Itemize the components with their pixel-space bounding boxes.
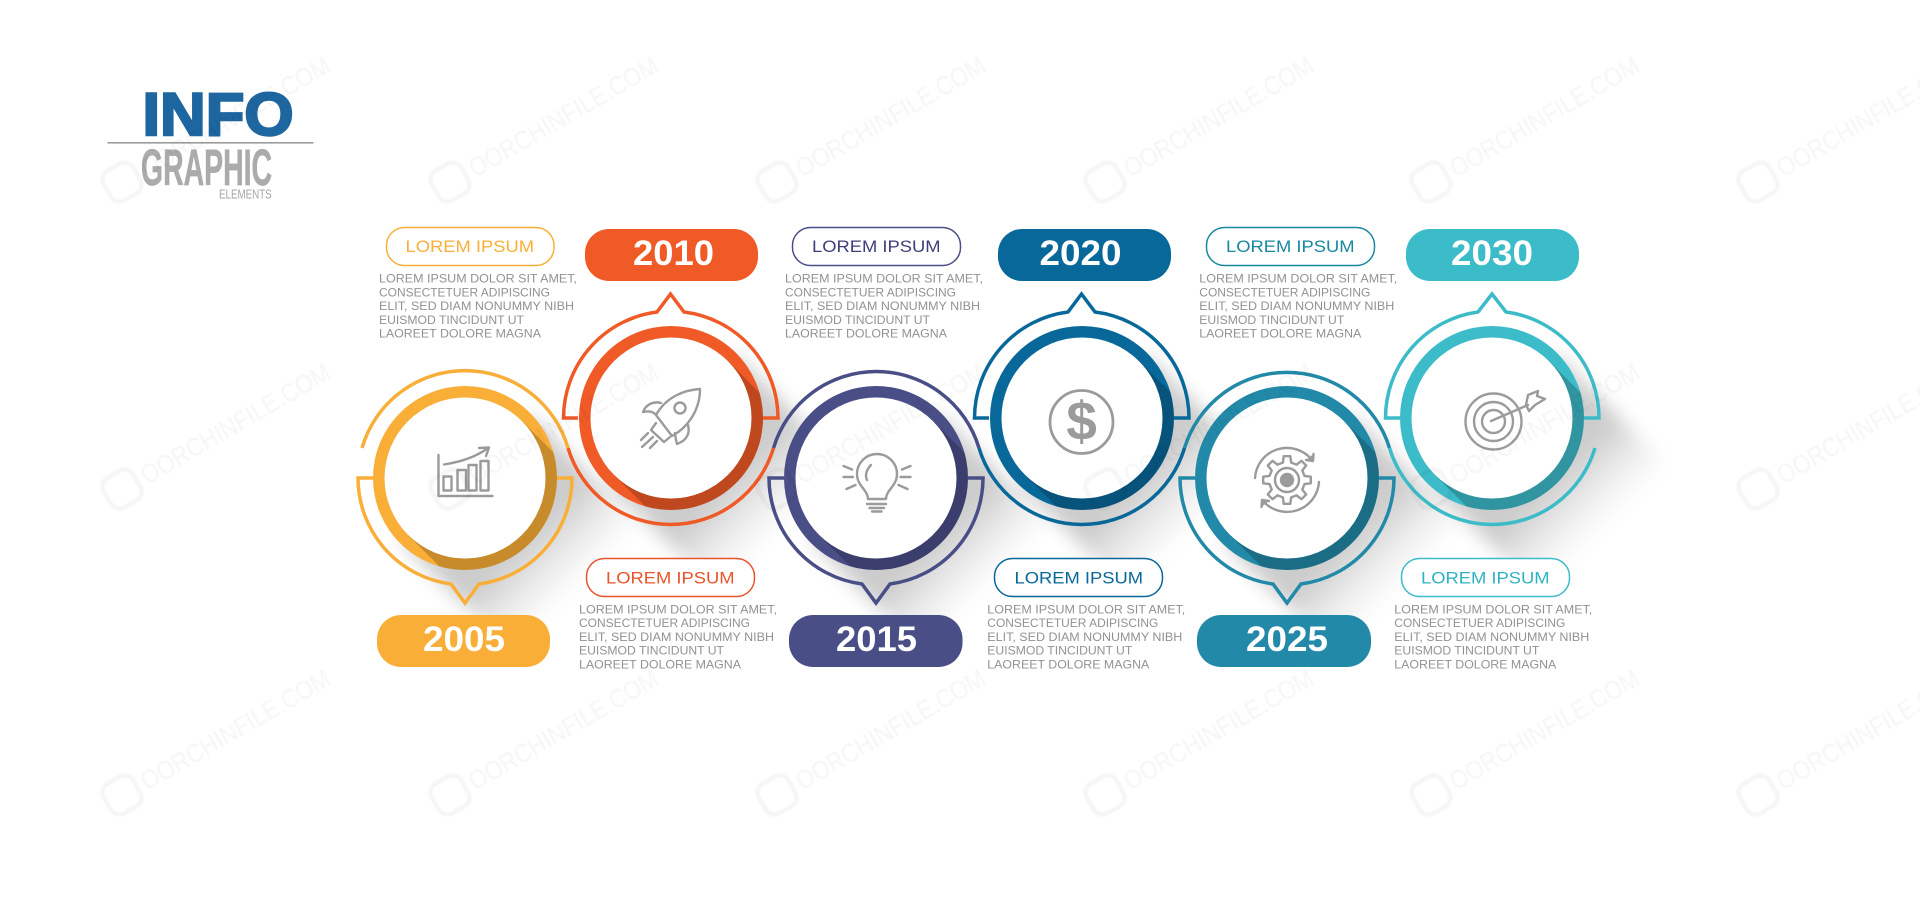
year pill 2005: 2005 xyxy=(423,620,505,659)
year pill 2015 xyxy=(789,615,962,667)
logo: infographic elements xyxy=(108,81,314,201)
body copy: CONSECTETUER ADIPISCING xyxy=(579,616,750,630)
watermark grid: OORCHINFILE.COM xyxy=(135,663,336,796)
watermark grid: OORCHINFILE.COM xyxy=(463,357,664,490)
body copy: ELIT, SED DIAM NONUMMY NIBH xyxy=(1199,299,1394,313)
body copy: LAOREET DOLORE MAGNA xyxy=(1199,327,1361,341)
body copy: LAOREET DOLORE MAGNA xyxy=(785,327,947,341)
body copy: LAOREET DOLORE MAGNA xyxy=(379,327,541,341)
watermark grid: OORCHINFILE.COM xyxy=(463,663,664,796)
text block 2030 xyxy=(1394,558,1592,671)
year pill 2010 xyxy=(585,229,758,281)
year pill 2025: 2025 xyxy=(1246,620,1328,659)
outlined label: LOREM IPSUM xyxy=(1226,238,1354,256)
outer outline arcs 2015 xyxy=(769,371,983,603)
body copy: CONSECTETUER ADIPISCING xyxy=(379,285,550,299)
milestone 2025 xyxy=(1178,370,1396,667)
outlined label: LOREM IPSUM xyxy=(606,569,734,587)
body copy: CONSECTETUER ADIPISCING xyxy=(1199,285,1370,299)
watermark grid xyxy=(99,48,1920,818)
body copy xyxy=(379,272,577,340)
year pill 2015: 2015 xyxy=(836,620,917,659)
outlined label: LOREM IPSUM xyxy=(1421,569,1550,587)
body copy: LOREM IPSUM DOLOR SIT AMET, xyxy=(579,602,777,616)
year pill 2020 xyxy=(998,229,1171,281)
body copy: ELIT, SED DIAM NONUMMY NIBH xyxy=(579,630,774,644)
body copy: LOREM IPSUM DOLOR SIT AMET, xyxy=(1199,272,1397,286)
text block 2025 xyxy=(1199,228,1397,340)
icon: bar chart with rising arrow xyxy=(438,448,492,496)
icon: rocket xyxy=(641,389,700,448)
logo word INFO: INFO xyxy=(142,81,294,148)
body copy: ELIT, SED DIAM NONUMMY NIBH xyxy=(987,630,1182,644)
text block 2005 xyxy=(379,228,577,340)
watermark grid: OORCHINFILE.COM xyxy=(1444,663,1645,796)
outer outline arcs 2030 xyxy=(1386,294,1599,525)
body copy: EUISMOD TINCIDUNT UT xyxy=(1199,313,1345,327)
thick ring and white disc 2030 xyxy=(1400,326,1584,510)
body copy: LAOREET DOLORE MAGNA xyxy=(987,657,1149,671)
thick ring and white disc 2010 xyxy=(579,326,763,510)
year pill 2030 xyxy=(1406,229,1579,281)
milestone 2005 xyxy=(356,368,574,667)
outlined label: LOREM IPSUM xyxy=(406,238,534,256)
body copy: ELIT, SED DIAM NONUMMY NIBH xyxy=(379,299,574,313)
milestone 2020 xyxy=(972,229,1191,526)
watermark grid: OORCHINFILE.COM xyxy=(1444,357,1645,490)
watermark grid: OORCHINFILE.COM xyxy=(1118,663,1319,796)
outlined label xyxy=(1402,558,1570,596)
outlined label xyxy=(386,228,554,266)
logo word ELEMENTS: ELEMENTS xyxy=(219,187,272,201)
long shadows behind circles xyxy=(401,354,1680,666)
thick ring and white disc 2020 xyxy=(990,326,1174,510)
body copy: LOREM IPSUM DOLOR SIT AMET, xyxy=(379,272,577,286)
body copy xyxy=(987,602,1185,671)
body copy: CONSECTETUER ADIPISCING xyxy=(987,616,1158,630)
logo divider xyxy=(108,142,314,144)
outer outline arcs 2025 xyxy=(1180,372,1394,603)
watermark grid: OORCHINFILE.COM xyxy=(790,50,991,183)
body copy xyxy=(1199,272,1397,340)
body copy: CONSECTETUER ADIPISCING xyxy=(1394,616,1565,630)
year pill 2030: 2030 xyxy=(1451,234,1533,273)
body copy: ELIT, SED DIAM NONUMMY NIBH xyxy=(1394,630,1589,644)
body copy: LAOREET DOLORE MAGNA xyxy=(1394,657,1556,671)
outlined label xyxy=(1206,228,1374,266)
year pill 2005 xyxy=(377,615,550,667)
watermark grid: OORCHINFILE.COM xyxy=(1444,50,1645,183)
text block 2015 xyxy=(785,228,983,340)
body copy xyxy=(785,272,983,340)
body copy: CONSECTETUER ADIPISCING xyxy=(785,285,956,299)
thick ring and white disc 2025 xyxy=(1195,386,1379,570)
icon: target with arrow xyxy=(1466,391,1545,450)
milestone 2015 xyxy=(767,370,985,667)
watermark grid: OORCHINFILE.COM xyxy=(790,663,991,796)
body copy: EUISMOD TINCIDUNT UT xyxy=(987,644,1133,658)
body copy: EUISMOD TINCIDUNT UT xyxy=(1394,644,1540,658)
body copy: LOREM IPSUM DOLOR SIT AMET, xyxy=(785,272,983,286)
year pill 2010: 2010 xyxy=(633,234,714,273)
watermark grid: OORCHINFILE.COM xyxy=(1118,357,1319,490)
icon: dollar coin xyxy=(1050,390,1113,454)
body copy: LOREM IPSUM DOLOR SIT AMET, xyxy=(1394,602,1592,616)
icon: light bulb xyxy=(844,454,910,512)
milestone 2030 xyxy=(1384,229,1601,526)
outer outline arcs 2020 xyxy=(974,294,1189,525)
body copy: EUISMOD TINCIDUNT UT xyxy=(379,313,525,327)
watermark grid: OORCHINFILE.COM xyxy=(1118,50,1319,183)
year pill 2020: 2020 xyxy=(1040,234,1122,273)
body copy: ELIT, SED DIAM NONUMMY NIBH xyxy=(785,299,980,313)
year pill 2025 xyxy=(1197,615,1371,667)
outer outline arcs 2010 xyxy=(564,294,778,525)
thick ring and white disc 2005 xyxy=(373,386,557,570)
text block 2020 xyxy=(987,558,1185,671)
text block 2010 xyxy=(579,558,777,671)
watermark grid: OORCHINFILE.COM xyxy=(135,50,336,183)
icon: dollar coin: $ xyxy=(1066,390,1097,452)
thick ring and white disc 2015 xyxy=(784,386,968,570)
icon: gear with cycle arrows xyxy=(1255,448,1319,512)
watermark grid: OORCHINFILE.COM xyxy=(135,357,336,490)
body copy: LAOREET DOLORE MAGNA xyxy=(579,657,741,671)
body copy: EUISMOD TINCIDUNT UT xyxy=(785,313,931,327)
body copy xyxy=(579,602,777,671)
body copy: LOREM IPSUM DOLOR SIT AMET, xyxy=(987,602,1185,616)
outlined label: LOREM IPSUM xyxy=(1014,569,1143,587)
milestone 2010 xyxy=(562,229,780,526)
watermark grid: OORCHINFILE.COM xyxy=(463,50,664,183)
body copy: EUISMOD TINCIDUNT UT xyxy=(579,644,725,658)
outlined label xyxy=(994,558,1162,596)
outlined label: LOREM IPSUM xyxy=(812,238,940,256)
outlined label xyxy=(792,228,960,266)
logo word GRAPHIC: GRAPHIC xyxy=(141,139,272,196)
outer outline arcs 2005 xyxy=(358,371,572,603)
outlined label xyxy=(586,558,754,596)
body copy xyxy=(1394,602,1592,671)
watermark grid: OORCHINFILE.COM xyxy=(790,357,991,490)
